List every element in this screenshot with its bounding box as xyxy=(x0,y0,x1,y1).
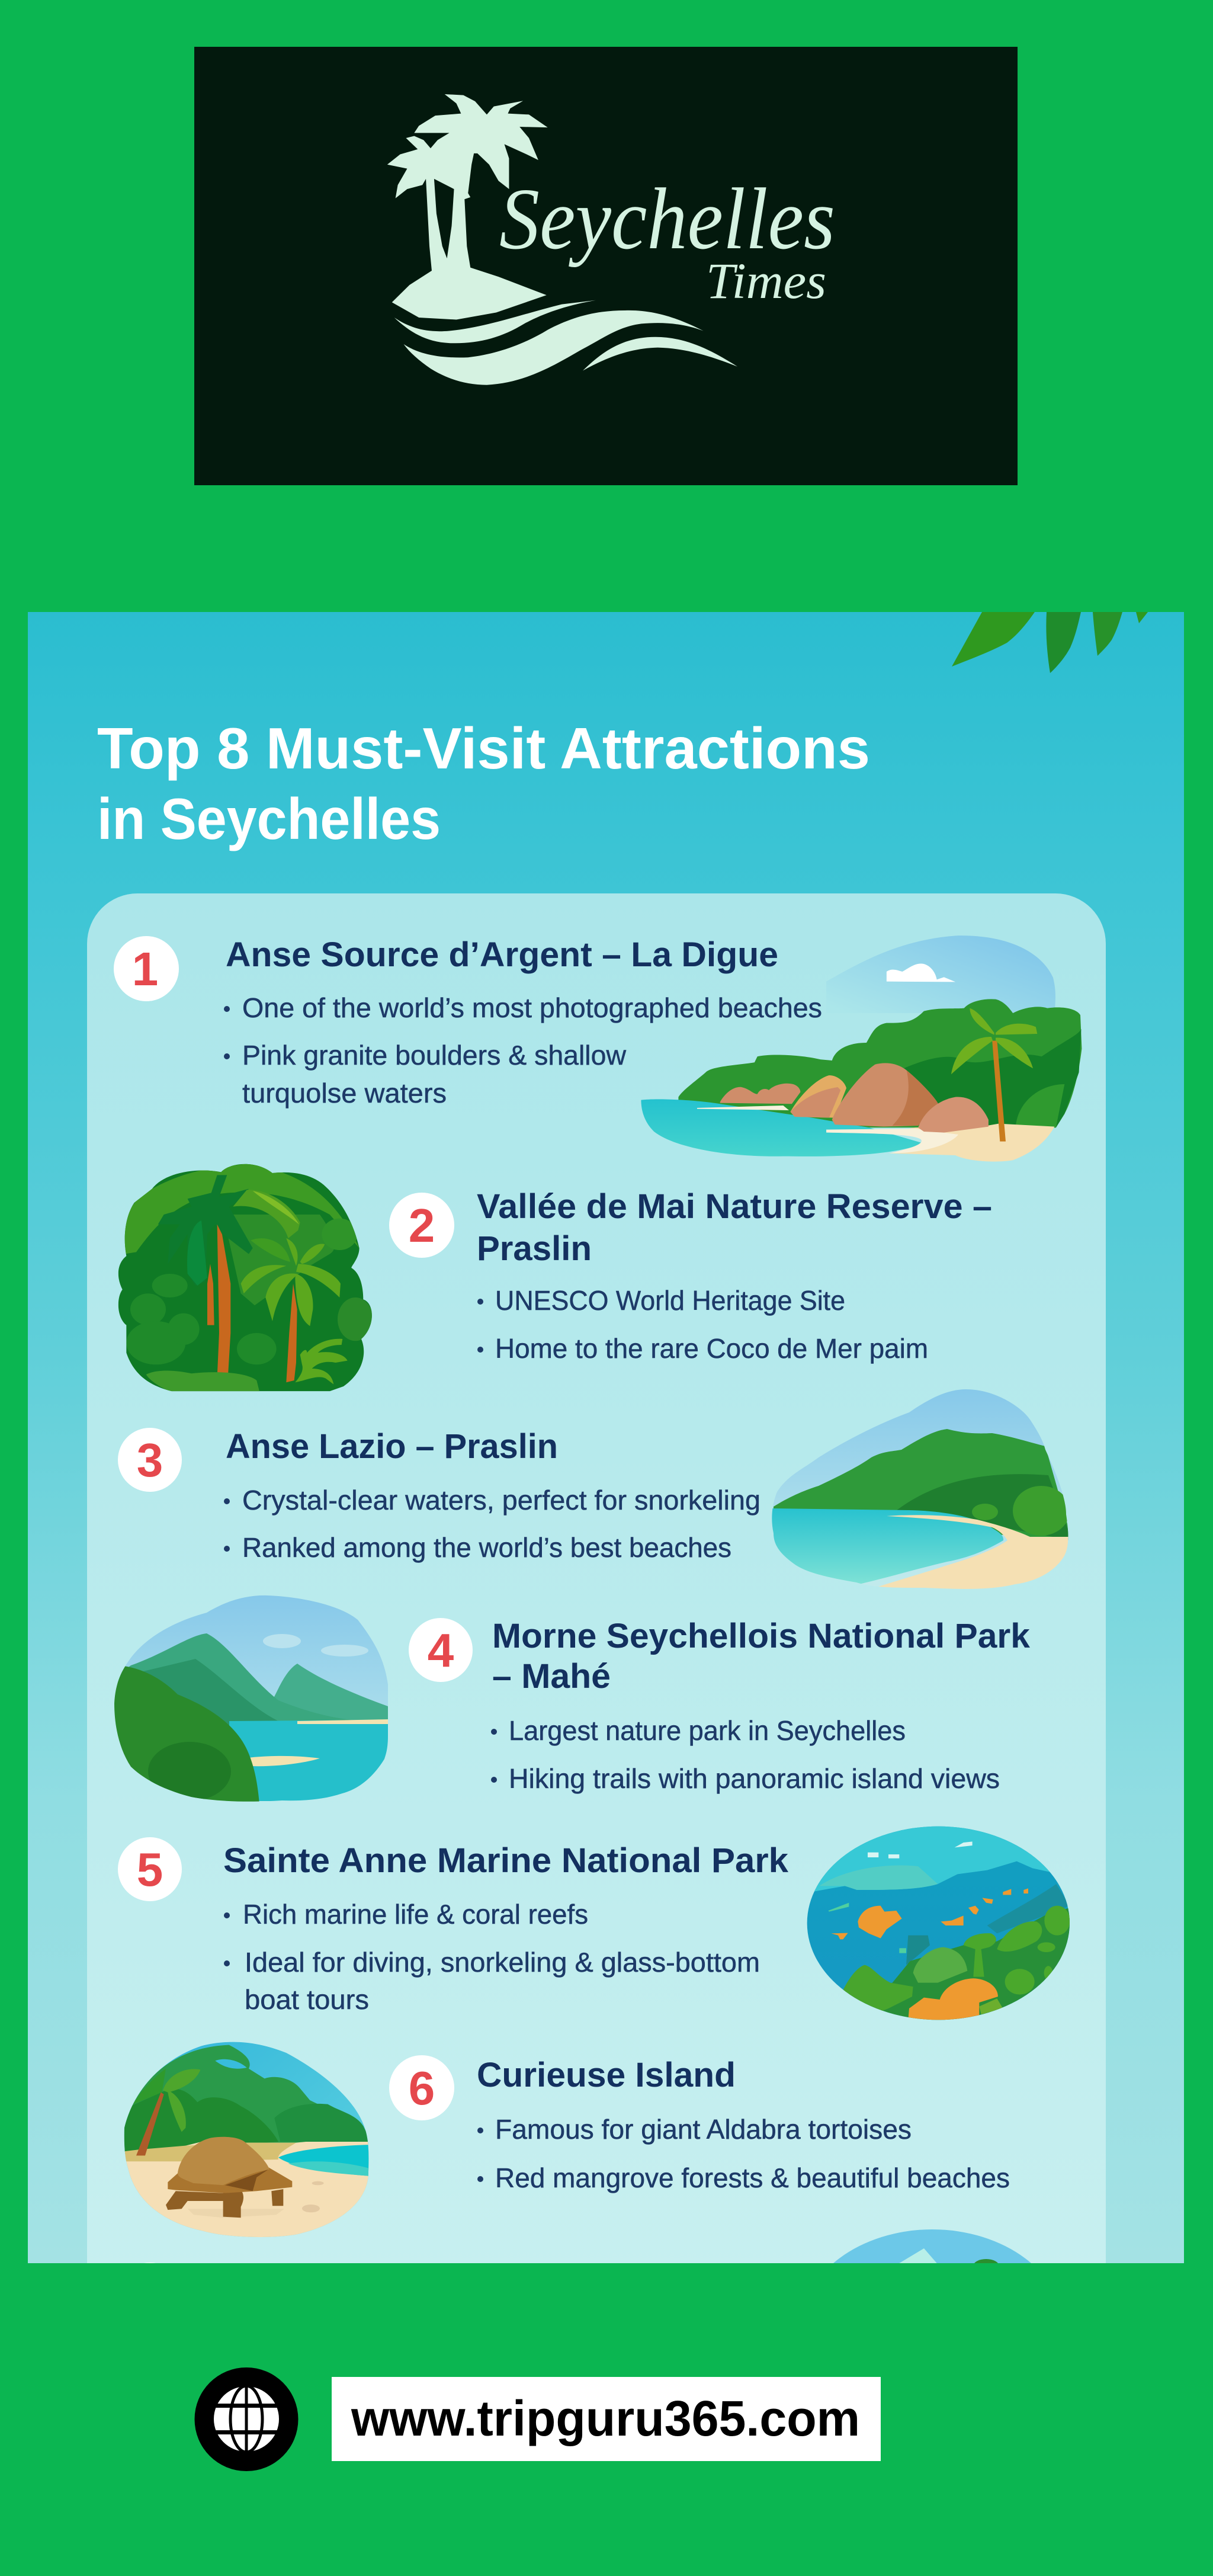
heading 2: Praslin xyxy=(477,1229,592,1268)
bullets 6 xyxy=(477,2114,1010,2193)
bullets 3: Crystal-clear waters, perfect for snorkeling xyxy=(242,1485,760,1516)
heading 4: – Mahé xyxy=(492,1657,611,1696)
number badge 6: 6 xyxy=(409,2062,435,2114)
website label xyxy=(332,2377,881,2461)
title: in Seychelles xyxy=(97,786,441,851)
illustration: mountains, forest and water xyxy=(113,1594,391,1804)
bullets 2 xyxy=(477,1285,928,1364)
title: Top 8 Must-Visit Attractions xyxy=(97,716,870,781)
website label: www.tripguru365.com xyxy=(351,2391,860,2446)
bullets 5 xyxy=(224,1899,760,2015)
bullets 3: Ranked among the world’s best beaches xyxy=(242,1532,731,1563)
heading 2: Vallée de Mai Nature Reserve – xyxy=(477,1187,992,1226)
title xyxy=(97,716,870,851)
illustration: palm forest xyxy=(113,1155,379,1392)
item 4: Morne Seychellois xyxy=(113,1594,1031,1804)
number badge 2 xyxy=(389,1193,454,1258)
item 7 cut-off number badge xyxy=(118,2263,182,2327)
bullets 1: Pink granite boulders & shallow xyxy=(242,1040,627,1071)
bullets 1: turquolse waters xyxy=(242,1078,447,1108)
heading 6: Curieuse Island xyxy=(477,2056,736,2094)
bullets 5: Ideal for diving, snorkeling & glass-bottom xyxy=(245,1947,760,1978)
item 6: Curieuse Island xyxy=(118,2035,1010,2242)
bullets 5: Rich marine life & coral reefs xyxy=(243,1899,588,1930)
icon: globe xyxy=(194,2367,299,2471)
bullets 4: Hiking trails with panoramic island views xyxy=(509,1763,1000,1794)
number badge 4: 4 xyxy=(428,1624,454,1677)
heading 5: Sainte Anne Marine National Park xyxy=(223,1841,789,1880)
decorative palm leaves xyxy=(952,612,1148,673)
illustration: bay with green hill and sand xyxy=(770,1386,1072,1594)
item 5: Sainte Anne Marine Park xyxy=(118,1819,1078,2026)
bullets 4: Largest nature park in Seychelles xyxy=(509,1715,906,1746)
number badge 6 xyxy=(389,2055,454,2120)
item 1: Anse Source d'Argent xyxy=(114,935,1082,1162)
number badge 3 xyxy=(118,1428,182,1492)
heading 4: Morne Seychellois National Park xyxy=(492,1617,1031,1655)
number badge 1: 1 xyxy=(132,943,158,995)
illustration: coral reef underwater xyxy=(800,1819,1078,2026)
illustration: giant tortoise on beach xyxy=(118,2035,373,2242)
bullets 3 xyxy=(224,1485,760,1563)
panel: attractions infographic xyxy=(28,612,1184,2375)
logo wordmark: Seychelles xyxy=(499,171,835,268)
bullets 1: One of the world’s most photographed beaches xyxy=(242,992,822,1023)
heading 3: Anse Lazio – Praslin xyxy=(226,1427,558,1466)
heading 1: Anse Source d’Argent – La Digue xyxy=(226,935,778,974)
heading 2 xyxy=(477,1193,991,1261)
bullets 6: Red mangrove forests & beautiful beaches xyxy=(495,2162,1010,2193)
bullets 4 xyxy=(491,1715,1000,1794)
illustration: beach with granite boulders and palm xyxy=(641,935,1082,1162)
number badge 5 xyxy=(118,1837,182,1901)
bullets 2: UNESCO World Heritage Site xyxy=(495,1285,845,1316)
number badge 5: 5 xyxy=(137,1843,163,1896)
bullets 2: Home to the rare Coco de Mer paim xyxy=(495,1333,928,1364)
heading 4 xyxy=(492,1617,1031,1696)
card background xyxy=(87,893,1106,2375)
number badge 3: 3 xyxy=(137,1434,163,1486)
logo panel: Seychelles Times xyxy=(194,47,1018,485)
number badge 4 xyxy=(409,1618,473,1682)
item 2: Vallee de Mai xyxy=(113,1155,992,1392)
icon: palm trees, island and waves xyxy=(387,94,737,385)
item 3: Anse Lazio xyxy=(118,1386,1072,1594)
item 7 cut-off illustration xyxy=(800,2228,1066,2273)
bullets 6: Famous for giant Aldabra tortoises xyxy=(495,2114,912,2145)
footer: website link xyxy=(194,2367,881,2471)
number badge 1 xyxy=(114,936,179,1001)
bullets 1 xyxy=(224,992,822,1108)
bullets 5: boat tours xyxy=(245,1984,369,2015)
number badge 2: 2 xyxy=(409,1199,435,1252)
logo subtitle: Times xyxy=(706,252,826,309)
